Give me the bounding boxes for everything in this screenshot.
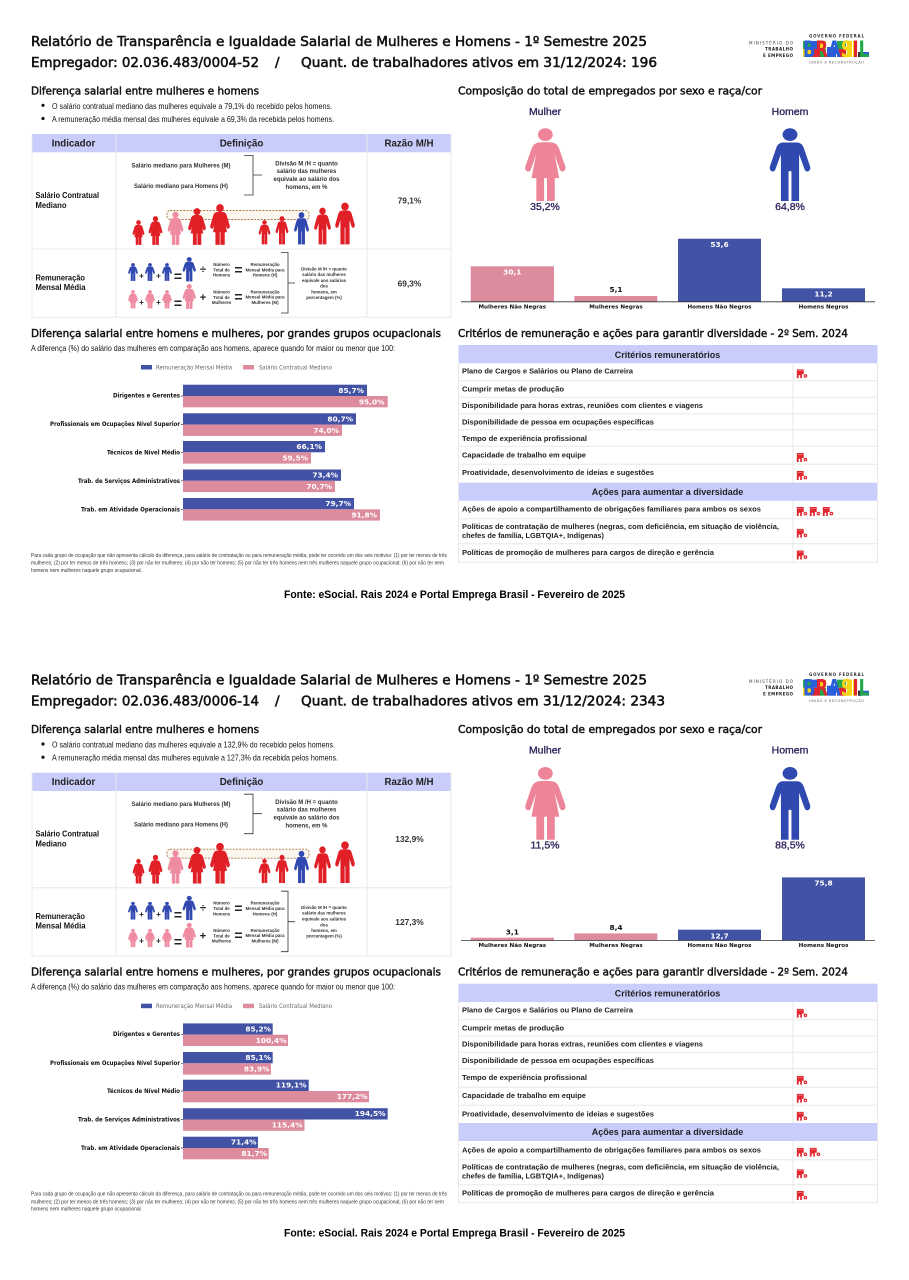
- definition: média: Número: [213, 901, 230, 906]
- panel: homem: [770, 106, 810, 213]
- horizontal bar chart: occupational groups: 74,0%: [313, 426, 340, 435]
- definition: média: Remuneração: [250, 928, 280, 933]
- panel: indicator table: [32, 134, 451, 317]
- definition: mediano: [132, 156, 340, 195]
- definition: mediano: equivale ao salário dos: [273, 816, 340, 822]
- horizontal bar chart: occupational groups: 83,9%: [244, 1064, 270, 1074]
- definition: média: Mulheres (M): [251, 300, 279, 305]
- icons: criteria marks: [797, 1009, 820, 1200]
- definition: média: =: [234, 288, 243, 304]
- bar chart: race and sex: Mulheres Não Negras: [478, 304, 547, 310]
- logo: ministério and governo federal: MINISTÉRIO DO: [749, 40, 793, 46]
- panel: criteria table: Políticas de promoção de mulheres para cargos de direção e gerência: [462, 548, 715, 557]
- definition: média: porcentagem (%): [306, 934, 342, 939]
- footnote: homens nem mulheres naquele grupo ocupacional.: [31, 1207, 142, 1213]
- heading: diferença salarial: Diferença salarial entre mulheres e homens: [31, 724, 259, 736]
- horizontal bar chart: occupational groups: 85,1%: [245, 1053, 272, 1062]
- definition: média: Mulheres (M): [251, 939, 279, 944]
- heading: grupos ocupacionais: Diferença salarial entre homens e mulheres, por grandes grupos ocupacionais: [31, 967, 441, 979]
- panel: criteria table: Políticas de promoção de mulheres para cargos de direção e gerência: [462, 1189, 715, 1198]
- definition: média: Remuneração: [250, 290, 280, 294]
- definition: média: Mensal Média para: [245, 906, 285, 911]
- horizontal bar chart: occupational groups: Profissionais em Ocupações Nível Superior: [50, 421, 180, 428]
- definition: mediano: Salário mediano para Mulheres (M): [132, 164, 230, 170]
- definition: média: Número: [213, 262, 230, 267]
- bar chart: race and sex: [461, 877, 875, 949]
- definition: média: homens, em: [311, 928, 337, 933]
- bar chart: race and sex: 53,6: [710, 240, 729, 249]
- bar chart: race and sex: 75,8: [814, 879, 833, 888]
- horizontal bar chart: occupational groups: Trab. de Serviços Administrativos: [78, 1118, 181, 1124]
- heading: critérios: Critérios de remuneração e ações para garantir diversidade - 2º Sem. 2024: [458, 967, 848, 979]
- title: Relatório de Transparência e Igualdade Salarial de Mulheres e Homens - 1º Semestre 2025: [31, 34, 647, 50]
- legend: Remuneração Mensal Média: [156, 364, 232, 372]
- title: [31, 34, 657, 71]
- panel: criteria table: Disponibilidade de pessoa em ocupações específicas: [462, 418, 654, 426]
- horizontal bar chart: occupational groups: Dirigentes e Gerentes: [113, 394, 181, 400]
- source line: Fonte: eSocial. Rais 2024 e Portal Emprega Brasil - Fevereiro de 2025: [284, 1228, 625, 1240]
- panel: indicator table: Indicador: [52, 777, 96, 788]
- panel: criteria table: Tempo de experiência profissional: [462, 434, 587, 443]
- definition: média: +: [156, 910, 161, 919]
- panel: criteria table: Capacidade de trabalho em equipe: [462, 1091, 586, 1100]
- definition: média: Mensal Média para: [245, 933, 285, 938]
- title: Empregador: 02.036.483/0004-52: [31, 55, 259, 71]
- panel: mulher: [525, 106, 566, 213]
- bar chart: race and sex: 30,1: [503, 268, 521, 276]
- panel: homem: Homem: [772, 106, 809, 118]
- title: /: [275, 694, 280, 710]
- panel: indicator table: Indicador: [52, 138, 96, 150]
- bar chart: race and sex: 5,1: [609, 285, 623, 294]
- panel: criteria table: Disponibilidade para horas extras, reuniões com clientes e viagens: [462, 401, 703, 410]
- horizontal bar chart: occupational groups: 115,4%: [272, 1121, 303, 1130]
- panel: criteria table: chefes de família, LGBTQIA+, Indígenas): [462, 1171, 604, 1180]
- source line: Fonte: eSocial. Rais 2024 e Portal Emprega Brasil - Fevereiro de 2025: [284, 589, 625, 601]
- logo: ministério and governo federal: GOVERNO FEDERAL: [809, 672, 864, 677]
- legend: Salário Contratual Mediano: [259, 364, 332, 372]
- heading: critérios: Critérios de remuneração e ações para garantir diversidade - 2º Sem. 2024: [458, 328, 848, 340]
- bar chart: race and sex: Mulheres Negras: [589, 943, 643, 949]
- heading: diferença salarial: Diferença salarial entre mulheres e homens: [31, 86, 259, 98]
- horizontal bar chart: occupational groups: Trab. em Atividade Operacionais: [81, 507, 181, 513]
- bar chart: race and sex: Mulheres Negras: [589, 304, 643, 310]
- horizontal bar chart: occupational groups: Trab. em Atividade Operacionais: [81, 1146, 181, 1152]
- definition: média: =: [234, 262, 243, 278]
- logo: ministério and governo federal: BRASIL: [803, 677, 869, 702]
- bullet list: O salário contratual mediano das mulheres equivale a 79,1% do recebido pelos homens.: [52, 101, 332, 111]
- definition: média: +: [156, 272, 161, 280]
- bar chart: race and sex: [461, 239, 875, 310]
- definition: média: =: [234, 927, 243, 943]
- logo: ministério and governo federal: TRABALHO: [765, 685, 794, 690]
- definition: média: +: [139, 272, 144, 280]
- definition: média: =: [174, 295, 182, 311]
- definition: média: [128, 252, 347, 313]
- definition: média: +: [139, 298, 144, 307]
- definition: média: Homens (H): [253, 911, 278, 916]
- bullet list: [41, 740, 338, 763]
- panel: mulher: 35,2%: [530, 201, 560, 213]
- horizontal bar chart: occupational groups: 95,0%: [359, 397, 385, 406]
- panel: criteria table: Disponibilidade de pessoa em ocupações específicas: [462, 1056, 654, 1065]
- panel: homem: Homem: [772, 745, 809, 757]
- panel: criteria table: Ações de apoio a compartilhamento de obrigações familiares para ambos os sexos: [462, 1146, 761, 1155]
- definition: média: dos: [320, 284, 328, 289]
- row label: remuneração: Remuneração: [36, 272, 85, 282]
- definition: média: Mensal Média para: [245, 268, 285, 272]
- row label: salário contratual: Salário Contratual: [36, 829, 99, 839]
- horizontal bar chart: occupational groups: Dirigentes e Gerentes: [113, 1032, 181, 1038]
- subtitle: A diferença (%) do salário das mulheres em comparação aos homens, aparece quando for maior ou menor que 100:: [31, 343, 395, 353]
- icons: median line-up: [133, 203, 354, 245]
- horizontal bar chart: occupational groups: [50, 385, 388, 521]
- legend: Salário Contratual Mediano: [259, 1003, 332, 1010]
- subtitle: A diferença (%) do salário das mulheres em comparação aos homens, aparece quando for maior ou menor que 100:: [31, 982, 395, 992]
- panel: criteria table: Critérios remuneratórios: [615, 350, 720, 360]
- definition: mediano: salário das mulheres: [277, 169, 337, 175]
- definition: média: Divisão M /H = quanto: [301, 266, 347, 272]
- definition: média: +: [139, 910, 144, 919]
- logo: ministério and governo federal: GOVERNO FEDERAL: [809, 34, 864, 38]
- definition: média: [128, 891, 347, 952]
- panel: indicator table: Mediano: [36, 839, 66, 849]
- panel: indicator table: Mediano: [36, 200, 66, 210]
- definition: média: ÷: [200, 264, 206, 276]
- panel: indicator table: Mensal Média: [36, 282, 86, 292]
- horizontal bar chart: occupational groups: 85,7%: [338, 386, 365, 395]
- horizontal bar chart: occupational groups: 66,1%: [296, 442, 323, 451]
- panel: criteria table: Proatividade, desenvolvimento de ideias e sugestões: [462, 468, 654, 477]
- bar chart: race and sex: Mulheres Não Negras: [478, 943, 547, 949]
- horizontal bar chart: occupational groups: [50, 1023, 388, 1159]
- panel: indicator table: [32, 773, 451, 956]
- panel: criteria table: Critérios remuneratórios: [615, 989, 720, 999]
- definition: média: Mulheres: [212, 939, 232, 944]
- definition: média: salário das mulheres: [302, 272, 346, 277]
- horizontal bar chart: occupational groups: Técnicos de Nível Médio: [107, 450, 180, 456]
- panel: homem: 64,8%: [775, 201, 805, 213]
- definition: média: =: [174, 907, 182, 923]
- definition: média: +: [200, 292, 206, 304]
- footnote: Para cada grupo de ocupação que não apresenta cálculo da diferença, para salário de contratação ou para remuneração média, pode ter ocorrido um dos seis motivos: (1) por ter menos de três: [31, 553, 447, 559]
- horizontal bar chart: occupational groups: 80,7%: [327, 414, 354, 424]
- row label: remuneração: Remuneração: [36, 911, 85, 921]
- panel: criteria table: Proatividade, desenvolvimento de ideias e sugestões: [462, 1110, 654, 1119]
- definition: mediano: homens, em %: [285, 185, 328, 191]
- panel: homem: 88,5%: [775, 840, 805, 852]
- panel: indicator table: Definição: [220, 777, 263, 788]
- horizontal bar chart: occupational groups: 91,8%: [351, 510, 378, 520]
- horizontal bar chart: occupational groups: Técnicos de Nível Médio: [107, 1088, 180, 1095]
- definition: média: porcentagem (%): [306, 295, 342, 300]
- panel: criteria table: Cumprir metas de produção: [462, 1023, 564, 1032]
- bar chart: race and sex: 3,1: [506, 928, 519, 937]
- bar chart: race and sex: 12,7: [710, 932, 729, 941]
- logo: ministério and governo federal: [749, 34, 869, 64]
- definition: média: +: [156, 937, 161, 946]
- definition: mediano: homens, em %: [285, 824, 328, 830]
- definition: média: Número: [213, 290, 230, 294]
- footnote: mulheres; (2) por ter menos de três homens; (3) por não ter mulheres; (4) por não ter homens; (5) por não ter três homens nem três mulheres naquele grupo ocupacional; (6) por não ter nem: [31, 561, 444, 567]
- panel: criteria table: Ações para aumentar a diversidade: [592, 1127, 743, 1137]
- report 2: [31, 672, 878, 1240]
- bar chart: race and sex: Homens Não Negros: [687, 943, 752, 949]
- report 1: [31, 34, 878, 601]
- bullet list: O salário contratual mediano das mulheres equivale a 132,9% do recebido pelos homens.: [52, 740, 335, 750]
- panel: mulher: 11,5%: [530, 840, 560, 852]
- panel: criteria table: Tempo de experiência profissional: [462, 1073, 587, 1082]
- panel: criteria table: Ações para aumentar a diversidade: [592, 487, 743, 497]
- panel: criteria table: [458, 345, 878, 562]
- icons: median line-up: [133, 842, 354, 883]
- bullet list: A remuneração média mensal das mulheres equivale a 69,3% da recebida pelos homens.: [52, 114, 334, 124]
- horizontal bar chart: occupational groups: 73,4%: [312, 470, 339, 480]
- definition: mediano: equivale ao salário dos: [273, 177, 340, 183]
- heading: composição: Composição do total de empregados por sexo e raça/cor: [458, 724, 763, 736]
- panel: criteria table: Políticas de contratação de mulheres (negras, com deficiência, em situação de violência,: [462, 522, 779, 531]
- definition: mediano: salário das mulheres: [277, 808, 337, 814]
- panel: mulher: Mulher: [529, 745, 562, 757]
- definition: média: dos: [320, 922, 328, 927]
- panel: criteria table: Cumprir metas de produção: [462, 385, 564, 394]
- panel: criteria table: Plano de Cargos e Salários ou Plano de Carreira: [462, 366, 634, 375]
- definition: média: equivale aos salários: [302, 278, 347, 283]
- panel: homem: [770, 745, 810, 852]
- title: [31, 673, 665, 710]
- definition: média: Homens (H): [253, 273, 278, 278]
- logo: ministério and governo federal: E EMPREGO: [763, 692, 794, 697]
- definition: média: =: [174, 268, 182, 284]
- bar chart: race and sex: Homens Negros: [799, 304, 849, 310]
- legend: [141, 364, 332, 372]
- footnote: [31, 1192, 447, 1213]
- definition: mediano: Divisão M /H = quanto: [275, 162, 338, 168]
- title: /: [275, 55, 280, 71]
- definition: mediano: Salário mediano para Homens (H): [134, 823, 228, 829]
- panel: indicator table: Definição: [220, 138, 263, 150]
- panel: indicator table: Razão M/H: [385, 138, 433, 150]
- definition: média: Total de: [213, 934, 230, 939]
- panel: indicator table: Mensal Média: [36, 921, 86, 931]
- panel: mulher: Mulher: [529, 106, 562, 118]
- definition: média: Mulheres: [212, 300, 232, 305]
- panel: mulher: [525, 745, 566, 852]
- legend: [141, 1003, 332, 1010]
- horizontal bar chart: occupational groups: 79,7%: [325, 499, 352, 508]
- definition: média: +: [200, 931, 206, 943]
- horizontal bar chart: occupational groups: 59,5%: [282, 454, 309, 462]
- definition: média: Remuneração: [250, 901, 280, 906]
- definition: média: Mensal Média para: [245, 294, 285, 300]
- footnote: [31, 553, 447, 574]
- horizontal bar chart: occupational groups: 81,7%: [241, 1149, 268, 1158]
- footnote: mulheres; (2) por ter menos de três homens; (3) por não ter mulheres; (4) por não ter homens; (5) por não ter três homens nem três mulheres naquele grupo ocupacional; (6) por não ter nem: [31, 1199, 444, 1205]
- value: remuneração: 127,3%: [395, 917, 424, 927]
- horizontal bar chart: occupational groups: Trab. de Serviços Administrativos: [78, 479, 181, 485]
- definition: média: Remuneração: [250, 262, 280, 267]
- heading: grupos ocupacionais: Diferença salarial entre homens e mulheres, por grandes grupos ocupacionais: [31, 328, 441, 340]
- definition: média: equivale aos salários: [302, 917, 347, 922]
- panel: criteria table: Políticas de contratação de mulheres (negras, com deficiência, em situação de violência,: [462, 1162, 779, 1171]
- panel: criteria table: Disponibilidade para horas extras, reuniões com clientes e viagens: [462, 1040, 703, 1049]
- heading: composição: Composição do total de empregados por sexo e raça/cor: [458, 86, 763, 98]
- definition: média: =: [174, 934, 182, 950]
- definition: média: homens, em: [311, 289, 337, 294]
- panel: criteria table: Ações de apoio a compartilhamento de obrigações familiares para ambos os sexos: [462, 504, 761, 513]
- logo: ministério and governo federal: TRABALHO: [765, 46, 794, 52]
- logo: ministério and governo federal: BRASIL: [803, 38, 869, 63]
- definition: média: +: [156, 298, 161, 307]
- panel: criteria table: [458, 984, 878, 1203]
- definition: mediano: Divisão M /H = quanto: [275, 800, 338, 806]
- value: salário contratual: 79,1%: [398, 196, 422, 206]
- horizontal bar chart: occupational groups: 70,7%: [306, 482, 333, 491]
- horizontal bar chart: occupational groups: Profissionais em Ocupações Nível Superior: [50, 1060, 180, 1067]
- title: Empregador: 02.036.483/0006-14: [31, 694, 259, 710]
- title: Relatório de Transparência e Igualdade Salarial de Mulheres e Homens - 1º Semestre 2025: [31, 673, 647, 689]
- legend: Remuneração Mensal Média: [156, 1003, 232, 1010]
- bullet list: A remuneração média mensal das mulheres equivale a 127,3% da recebida pelos homens.: [52, 753, 338, 763]
- value: salário contratual: 132,9%: [395, 834, 424, 844]
- title: Quant. de trabalhadores ativos em 31/12/2024: 196: [301, 55, 657, 71]
- logo: ministério and governo federal: MINISTÉRIO DO: [749, 679, 793, 684]
- panel: criteria table: chefes de família, LGBTQIA+, Indígenas): [462, 531, 604, 540]
- horizontal bar chart: occupational groups: 100,4%: [256, 1036, 287, 1045]
- horizontal bar chart: occupational groups: 177,2%: [337, 1092, 368, 1101]
- horizontal bar chart: occupational groups: 119,1%: [276, 1081, 307, 1090]
- panel: criteria table: Capacidade de trabalho em equipe: [462, 450, 586, 460]
- icons: criteria marks: [797, 369, 833, 560]
- bar chart: race and sex: 11,2: [814, 290, 833, 298]
- definition: média: Número: [213, 928, 230, 933]
- definition: média: Homens: [213, 273, 231, 278]
- bar chart: race and sex: 8,4: [609, 923, 623, 932]
- definition: média: ÷: [200, 903, 206, 915]
- bar chart: race and sex: Homens Negros: [799, 943, 849, 949]
- logo: ministério and governo federal: [749, 672, 869, 703]
- definition: mediano: [132, 794, 340, 834]
- logo: ministério and governo federal: UNIÃO E RECONSTRUÇÃO: [809, 698, 864, 703]
- definition: mediano: Salário mediano para Homens (H): [134, 184, 228, 190]
- definition: média: salário das mulheres: [302, 911, 346, 916]
- definition: média: Total de: [213, 295, 230, 300]
- definition: média: +: [139, 937, 144, 946]
- definition: média: Divisão M /H = quanto: [301, 905, 347, 910]
- panel: criteria table: Plano de Cargos e Salários ou Plano de Carreira: [462, 1005, 634, 1014]
- definition: média: Total de: [213, 268, 230, 272]
- row label: salário contratual: Salário Contratual: [36, 190, 99, 200]
- definition: média: =: [234, 900, 243, 916]
- title: Quant. de trabalhadores ativos em 31/12/2024: 2343: [301, 694, 665, 710]
- footnote: Para cada grupo de ocupação que não apresenta cálculo da diferença, para salário de contratação ou para remuneração média, pode ter ocorrido um dos seis motivos: (1) por ter menos de três: [31, 1192, 447, 1198]
- bullet list: [41, 101, 334, 124]
- footnote: homens nem mulheres naquele grupo ocupacional.: [31, 568, 142, 574]
- logo: ministério and governo federal: UNIÃO E RECONSTRUÇÃO: [809, 60, 864, 64]
- bar chart: race and sex: Homens Não Negros: [687, 304, 752, 310]
- panel: indicator table: Razão M/H: [385, 777, 433, 788]
- horizontal bar chart: occupational groups: 71,4%: [231, 1138, 257, 1147]
- definition: mediano: Salário mediano para Mulheres (M): [132, 802, 230, 808]
- horizontal bar chart: occupational groups: 194,5%: [355, 1109, 386, 1118]
- logo: ministério and governo federal: E EMPREGO: [763, 53, 794, 58]
- horizontal bar chart: occupational groups: 85,2%: [245, 1024, 272, 1034]
- definition: média: Total de: [213, 906, 230, 911]
- definition: média: Homens: [213, 911, 231, 916]
- value: remuneração: 69,3%: [398, 278, 422, 288]
